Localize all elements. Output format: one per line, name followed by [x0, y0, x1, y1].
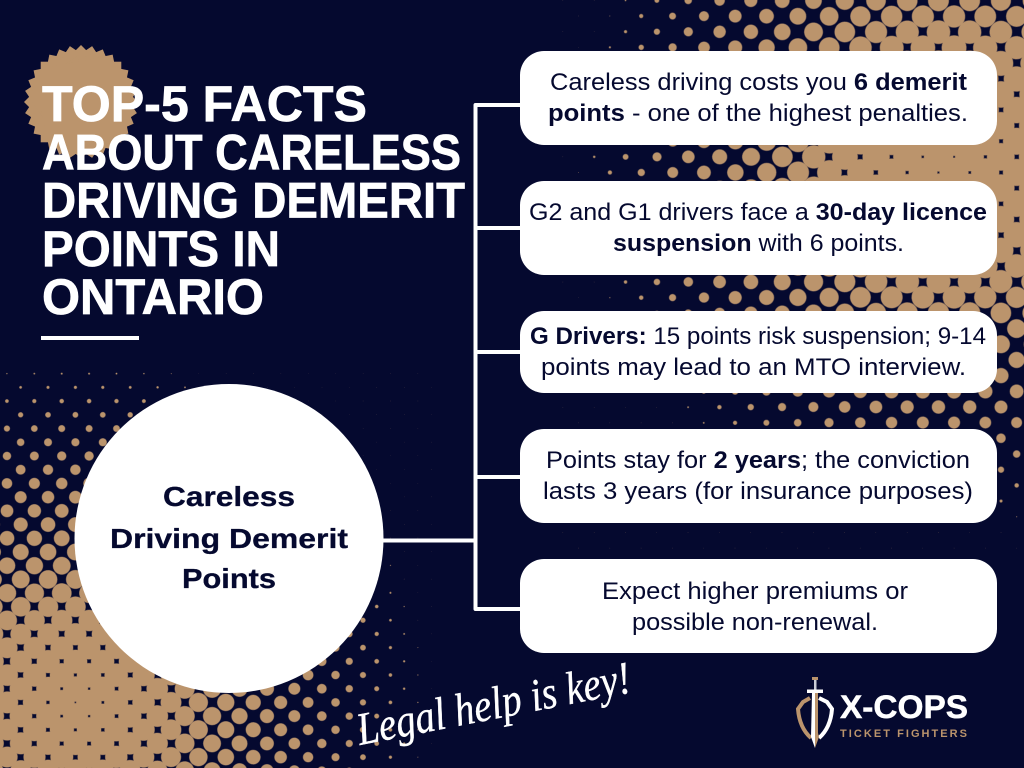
panel: fact 3: G Drivers: 15 points risk suspension; 9-14: [530, 323, 986, 350]
halftone dots: top right: [560, 0, 1024, 560]
central circle: [74, 384, 384, 693]
panel: fact 3: [520, 311, 997, 393]
panel: fact 3: points may lead to an MTO interview.: [541, 354, 966, 381]
title: POINTS IN: [42, 221, 280, 277]
connector lines from circle to fact cards: [380, 105, 520, 609]
badge: tan starburst behind title: [24, 45, 138, 159]
icon: sword and shield: [798, 677, 832, 748]
logo: X-COPS Ticket Fighters: X-COPS: [840, 689, 968, 725]
panel: fact 4: Points stay for 2 years; the conviction: [546, 447, 970, 474]
panel: fact 4: [520, 429, 997, 523]
panel: fact 4: lasts 3 years (for insurance purposes): [543, 478, 973, 505]
panel: fact 5: possible non-renewal.: [632, 609, 878, 636]
circle label: Points: [182, 563, 276, 594]
panel: fact 1: Careless driving costs you 6 demerit: [550, 69, 967, 96]
script tagline: Legal help is key!: [351, 652, 635, 755]
panel: fact 5: [520, 559, 997, 653]
halftone dots: bottom left: [0, 370, 440, 768]
panel: fact 2: suspension with 6 points.: [613, 230, 904, 257]
panel: fact 2: G2 and G1 drivers face a 30-day licence: [529, 199, 987, 226]
title: DRIVING DEMERIT: [42, 173, 465, 229]
title: [42, 76, 465, 325]
circle label: Careless: [163, 481, 295, 512]
circle label: Driving Demerit: [110, 523, 348, 554]
circle label: [110, 481, 348, 594]
panel: fact 1: [520, 51, 997, 145]
panel: fact 1: points - one of the highest penalties.: [548, 100, 968, 127]
panel: fact 2: [520, 181, 997, 275]
panel: fact 5: Expect higher premiums or: [602, 578, 908, 605]
logo: X-COPS Ticket Fighters: TICKET FIGHTERS: [840, 728, 967, 740]
logo: X-COPS Ticket Fighters: [798, 677, 968, 748]
title underline: [41, 336, 139, 340]
title: TOP-5 FACTS: [42, 76, 367, 132]
title: ABOUT CARELESS: [42, 124, 461, 180]
title: ONTARIO: [42, 269, 264, 325]
